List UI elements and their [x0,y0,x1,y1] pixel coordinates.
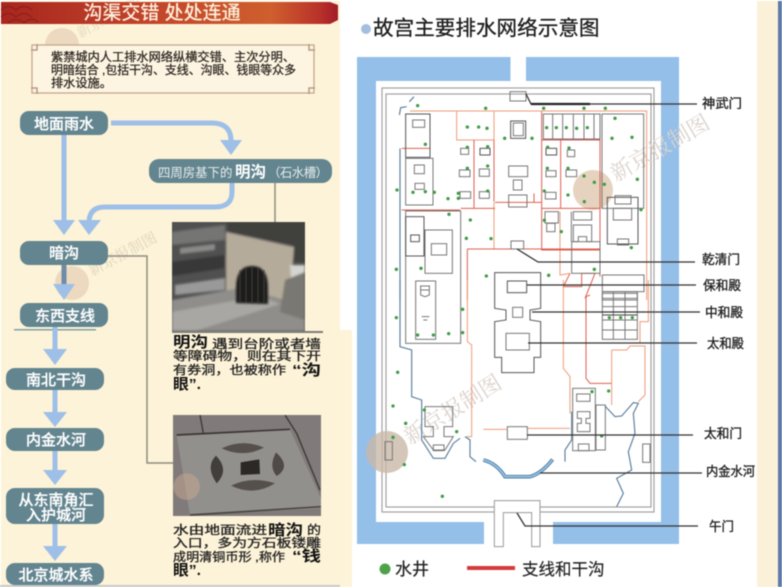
flow arrow: covered drain to east-west branch [53,265,75,300]
leader: Hall of Preserving Harmony: 保和殿 [703,278,741,293]
caption: coin eye: 入口，多为方石板镂雕 [173,535,321,550]
panel: cream overflow below photo strip [340,330,352,587]
Meridian Gate [494,501,540,547]
leader: Gate of Supreme Harmony: 太和门 [704,426,742,441]
drainage lines lower [400,280,648,507]
flow arrow: rain to open drain [111,123,242,155]
caption: open drain: “沟 [292,361,321,379]
legend: 支线和干沟 [522,560,604,579]
watermark: map [366,110,714,473]
panel: left drainage flow background [1,1,340,586]
flow box: moat entry from south-east corner: 从东南角汇 [18,491,94,509]
palace walls [382,88,654,512]
right blue edge [778,1,782,587]
wells upper [395,104,643,278]
leader: Shenwu Gate [526,94,742,111]
intro text frame: 明暗结合 ,包括干沟、支线、沟眼、钱眼等众多 [51,62,296,77]
flow box: surface rainwater [20,111,108,135]
flow box: surface rainwater: 地面雨水 [34,116,94,133]
leader: Inner Golden Water River: 内金水河 [706,464,755,479]
leader: Hall of Central Harmony: 中和殿 [705,305,743,320]
flow box: covered drain [20,241,108,265]
flow arrow: trunk to inner golden river [43,390,67,427]
flow arrow: inner river to moat [43,451,67,485]
photo: stone arch culvert [172,222,305,331]
caption: coin eye: 水由地面流进 [173,523,267,537]
buildings lower [385,273,650,462]
flow arrow: open drain to covered drain [78,183,232,235]
flow box: east-west branch [20,303,108,327]
leader: Meridian Gate: 午门 [709,519,734,534]
legend: 水井 [395,560,429,579]
page edge [0,585,340,587]
flow box: inner golden water river [6,428,104,451]
caption: coin eye: 成明清铜币形 ,称作 [173,549,285,564]
caption: open drain: 有券洞，也被称作 [173,362,286,377]
caption: coin eye: “钱 [292,547,321,565]
title banner [1,2,338,24]
leader: Shenwu Gate: 神武门 [702,96,742,111]
leader: Hall of Supreme Harmony: 太和殿 [707,336,744,351]
caption: open drain: 明沟 [173,333,208,351]
title banner: 沟渠交错 处处连通 [83,2,241,24]
flow box: covered drain: 暗沟 [49,245,79,262]
connector: open drain to photo [274,183,276,222]
buildings upper [406,92,644,343]
caption: coin eye [173,521,321,579]
flow arrow: rain to covered drain [53,135,75,235]
moat [357,57,679,544]
flow box: open drain: 明沟 [235,162,266,181]
flow box: Beijing water system [6,563,104,585]
flow box: north-south trunk: 南北干沟 [26,372,86,389]
flow box: open drain: （石水槽） [268,166,328,180]
flow box: moat entry from south-east corner: 入护城河 [26,507,86,524]
watermark: left panel: 新京报制图 [85,228,160,280]
map heading: 故宫主要排水网络示意图 [373,17,600,40]
flow box: north-south trunk [6,368,104,390]
flow box: Beijing water system: 北京城水系 [18,566,94,584]
wells lower [391,308,634,498]
palace map [366,88,714,547]
photo: coin-shaped drain cover [173,415,322,516]
panel: map white background [340,0,757,587]
drainage lines upper [399,97,647,300]
intro text frame: 排水设施。 [51,76,112,90]
caption: coin eye: 眼”. [173,562,201,579]
flow arrow: east-west branch to north-south trunk [14,327,96,365]
watermark: map: 新京报制图 [606,110,714,186]
flow box: open drain: 四周房基下的 [158,165,232,180]
flow box: open drain [149,159,332,183]
flow box: east-west branch: 东西支线 [35,307,95,325]
intro text frame: 紫禁城内人工排水网络纵横交错、主次分明、 [51,49,295,64]
leader: Meridian Gate [517,513,734,534]
leader: Qianqing Gate [517,249,740,267]
photo base strip [172,331,323,333]
caption: coin eye: 暗沟 [268,521,303,539]
caption: open drain: 等障碍物，则在其下开 [173,348,321,363]
flow box: inner golden water river: 内金水河 [26,431,86,449]
caption: open drain: 遇到台阶或者墙 [212,336,321,351]
flow box: moat entry from south-east corner [6,488,104,524]
caption: open drain: 眼”. [173,376,201,393]
caption: open drain [173,333,321,393]
flow arrow: moat to city water system [43,524,67,561]
connector: covered drain to coin-eye photo [108,256,173,463]
panel: right cream strip [757,1,778,587]
leader: Qianqing Gate: 乾清门 [702,252,740,267]
legend [380,560,604,579]
watermark: map: 新京报制图 [399,370,506,449]
watermark: left panel [45,0,160,300]
caption: coin eye: 的 [307,522,321,537]
intro text frame [31,44,315,94]
